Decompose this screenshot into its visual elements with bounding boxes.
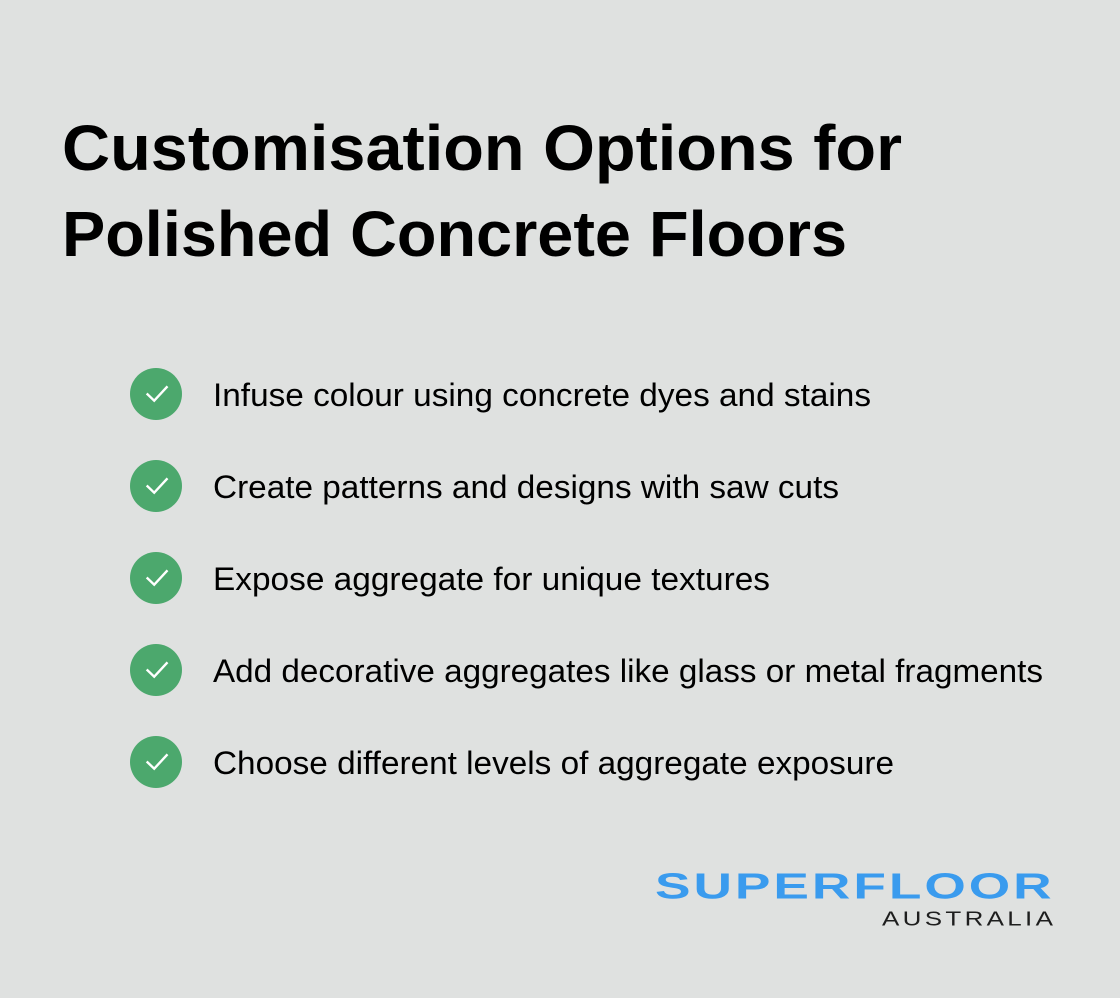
item 3: expose aggregate: Expose aggregate for unique textures (213, 561, 770, 597)
item 4: decorative aggregates (130, 644, 1043, 696)
item 1: infuse colour: Infuse colour using concrete dyes and stains (213, 377, 871, 413)
title (62, 112, 902, 270)
item 2: patterns with saw cuts: Create patterns and designs with saw cuts (213, 469, 839, 505)
item 2: patterns with saw cuts (130, 460, 839, 512)
item 1: infuse colour (130, 368, 871, 420)
logo: Superfloor Australia: SUPERFLOOR (655, 866, 1052, 906)
item 5: levels of exposure (130, 736, 894, 788)
item 5: levels of exposure: Choose different levels of aggregate exposure (213, 745, 894, 781)
checklist (130, 368, 1043, 788)
logo: Superfloor Australia: AUSTRALIA (882, 907, 1054, 930)
logo: Superfloor Australia (655, 866, 1054, 930)
item 3: expose aggregate (130, 552, 770, 604)
item 4: decorative aggregates: Add decorative aggregates like glass or metal fragments (213, 653, 1043, 689)
title: Customisation Options for (62, 112, 902, 184)
title: Polished Concrete Floors (62, 198, 847, 270)
